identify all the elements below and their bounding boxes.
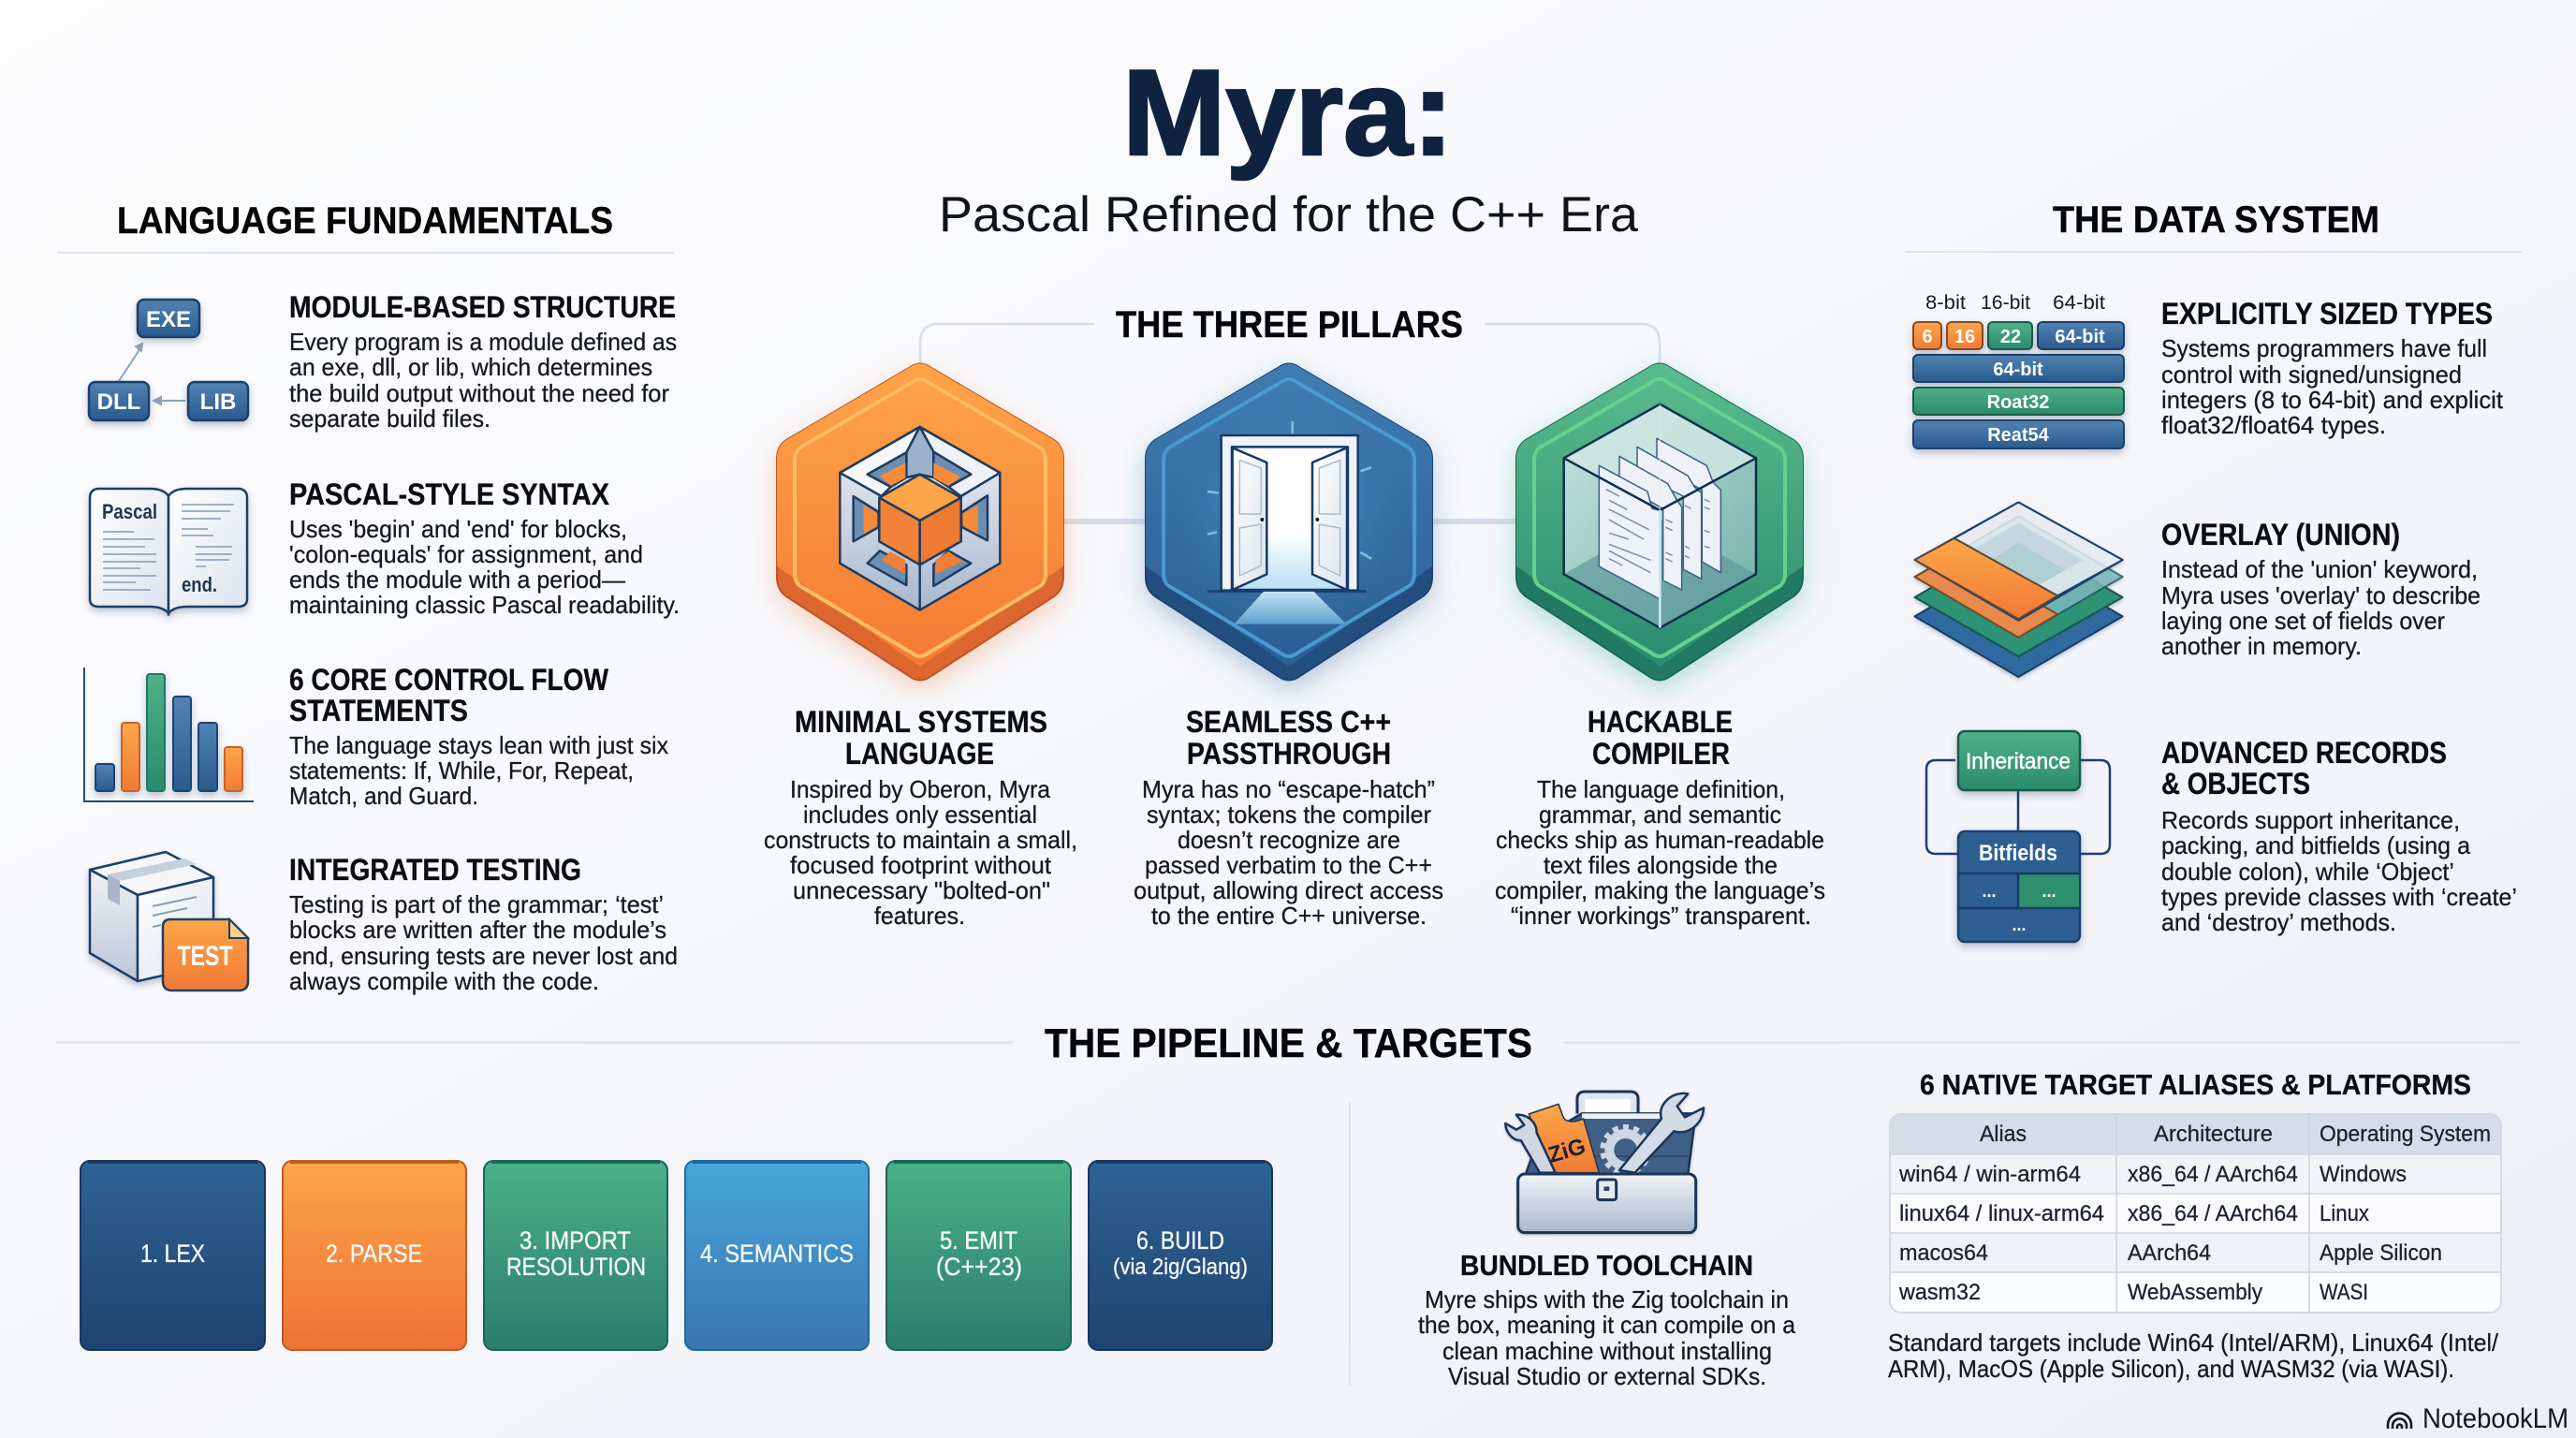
text: standard targets note: ARM), MacOS (Apple Silicon), and WASM32 (via WASI).	[1888, 1355, 2454, 1383]
text: seamless c++ passthrough: Myra has no “escape-hatch”	[1142, 775, 1435, 803]
pipeline step 4	[685, 1161, 869, 1350]
text: advanced records & objects: & OBJECTS	[2161, 767, 2310, 800]
text: minimal systems language: Inspired by Oberon, Myra	[790, 775, 1051, 803]
text: seamless c++ passthrough: doesn’t recognize are	[1178, 826, 1400, 854]
table: targets: x86_64 / AArch64	[2128, 1201, 2298, 1226]
table: targets: Architecture	[2154, 1122, 2273, 1147]
text: overlay (union): laying one set of fields over	[2161, 607, 2445, 635]
text: pascal-style syntax: ends the module with a period—	[289, 565, 625, 594]
heading: pipeline and targets: THE PIPELINE & TARGETS	[1045, 1020, 1532, 1066]
text: explicitly sized types: control with signed/unsigned	[2161, 360, 2462, 389]
text: minimal systems language: features.	[874, 902, 965, 930]
text: integrated testing	[289, 853, 678, 995]
pipeline step 3: RESOLUTION	[506, 1253, 646, 1281]
icon: test package	[90, 852, 248, 990]
text: bundled toolchain: BUNDLED TOOLCHAIN	[1460, 1249, 1753, 1282]
label: zig tag: ZiG	[1545, 1134, 1588, 1168]
text: hackable compiler: “inner workings” transparent.	[1511, 902, 1811, 930]
heading: language fundamentals: LANGUAGE FUNDAMENTALS	[117, 200, 613, 242]
subtitle: Pascal Refined for the C++ Era	[939, 187, 1639, 242]
text: hackable compiler: grammar, and semantic	[1539, 800, 1781, 829]
icon: module outputs: EXE	[146, 307, 191, 332]
text: pascal-style syntax	[289, 477, 680, 619]
icon: open book: Pascal	[102, 500, 157, 523]
pipeline step 6	[1089, 1161, 1272, 1350]
text: hackable compiler: compiler, making the language’s	[1495, 876, 1825, 904]
table: targets: Alias	[1980, 1122, 2027, 1147]
table: targets: Operating System	[2320, 1122, 2491, 1147]
text: module-based structure	[289, 290, 677, 433]
text: minimal systems language: focused footprint without	[790, 851, 1052, 879]
text: advanced records & objects: ADVANCED RECORDS	[2161, 736, 2447, 770]
icon: sized types	[1913, 292, 2124, 448]
icon: open book: end.	[182, 573, 217, 596]
text: bundled toolchain: Visual Studio or external SDKs.	[1448, 1362, 1766, 1390]
table: targets: macos64	[1899, 1240, 1988, 1266]
text: overlay (union)	[2161, 518, 2481, 660]
table: targets: linux64 / linux-arm64	[1899, 1201, 2104, 1226]
text: hackable compiler: checks ship as human-readable	[1496, 826, 1824, 854]
icon: sized types: 16	[1954, 327, 1975, 347]
icon: module outputs: LIB	[200, 389, 236, 415]
text: hackable compiler: The language definition,	[1537, 775, 1785, 803]
text: minimal systems language: unnecessary "bolted-on"	[793, 876, 1050, 904]
panel: pipeline and targets	[56, 1020, 2520, 1390]
pipeline step 2: 2. PARSE	[326, 1240, 422, 1268]
text: pascal-style syntax: PASCAL-STYLE SYNTAX	[289, 477, 610, 511]
text: bundled toolchain: the box, meaning it can compile on a	[1418, 1311, 1796, 1339]
text: hackable compiler: text files alongside the	[1544, 851, 1778, 879]
text: module-based structure: the build output without the need for	[289, 379, 669, 407]
text: module-based structure: an exe, dll, or lib, which determines	[289, 353, 652, 381]
icon: records and bitfields: Bitfields	[1979, 841, 2057, 866]
icon: records and bitfields: Inheritance	[1966, 749, 2071, 774]
icon: impossible cube	[840, 427, 1000, 610]
icon: sized types: 64-bit	[1993, 360, 2043, 380]
pipeline step 1	[80, 1161, 265, 1350]
icon: records and bitfields: ...	[2012, 916, 2027, 934]
text: overlay (union): another in memory.	[2161, 632, 2362, 660]
icon: overlay layers	[1915, 503, 2123, 677]
text: advanced records & objects: double colon), while ‘Object’	[2161, 858, 2454, 886]
pipeline step 3: 3. IMPORT	[520, 1226, 631, 1255]
heading: native target aliases: 6 NATIVE TARGET ALIASES & PLATFORMS	[1920, 1068, 2471, 1101]
icon: records and bitfields	[1926, 731, 2110, 942]
pipeline step 4: 4. SEMANTICS	[700, 1240, 854, 1268]
text: explicitly sized types	[2161, 297, 2504, 439]
text: minimal systems language: constructs to maintain a small,	[764, 826, 1077, 854]
icon: records and bitfields: ...	[1982, 882, 1997, 901]
text: seamless c++ passthrough: PASSTHROUGH	[1187, 737, 1391, 770]
table: targets: wasm32	[1898, 1280, 1981, 1305]
table: targets: Windows	[2320, 1162, 2407, 1187]
text: advanced records & objects: and ‘destroy’ methods.	[2161, 908, 2396, 936]
pillar: minimal systems language	[764, 356, 1077, 930]
text: seamless c++ passthrough: syntax; tokens the compiler	[1147, 800, 1431, 829]
panel: the data system	[1905, 199, 2522, 942]
icon: open book	[90, 489, 247, 613]
text: minimal systems language: LANGUAGE	[845, 737, 994, 770]
text: integrated testing: blocks are written after the module’s	[289, 916, 666, 944]
text: explicitly sized types: Systems programmers have full	[2161, 334, 2487, 362]
table: targets	[1890, 1114, 2501, 1313]
text: seamless c++ passthrough	[1134, 705, 1443, 930]
text: control flow statements: Match, and Guard.	[289, 782, 478, 810]
text: integrated testing: Testing is part of the grammar; ‘test’	[289, 890, 664, 918]
pipeline step 6: (via 2ig/Glang)	[1113, 1255, 1248, 1280]
icon: sized types: 6	[1922, 327, 1933, 347]
text: module-based structure: separate build files.	[289, 404, 490, 433]
table: targets: x86_64 / AArch64	[2128, 1162, 2298, 1187]
text: bundled toolchain: Myre ships with the Zig toolchain in	[1425, 1285, 1789, 1313]
text: minimal systems language: MINIMAL SYSTEMS	[795, 705, 1047, 739]
table: targets: Linux	[2320, 1201, 2369, 1226]
text: pascal-style syntax: Uses 'begin' and 'end' for blocks,	[289, 515, 627, 543]
pipeline step 5: 5. EMIT	[940, 1226, 1017, 1255]
table: targets: WASI	[2320, 1280, 2368, 1305]
pipeline step 6: 6. BUILD	[1136, 1226, 1224, 1255]
text: explicitly sized types: integers (8 to 64-bit) and explicit	[2161, 386, 2504, 414]
heading: the data system: THE DATA SYSTEM	[2053, 199, 2379, 241]
hexagon: blue	[1139, 356, 1439, 680]
text: hackable compiler	[1495, 705, 1825, 930]
text: explicitly sized types: float32/float64 types.	[2161, 411, 2386, 439]
table: targets: Apple Silicon	[2320, 1240, 2442, 1266]
pillar: seamless c++ passthrough	[1134, 356, 1443, 930]
icon: glass cube of documents	[1564, 404, 1756, 628]
text: advanced records & objects: Records support inheritance,	[2161, 806, 2460, 834]
text: minimal systems language: includes only essential	[803, 800, 1037, 829]
icon: sized types: 64-bit	[2055, 327, 2105, 347]
text: bundled toolchain	[1418, 1249, 1796, 1390]
icon: bar chart	[84, 668, 254, 801]
icon: sized types: 8-bit	[1925, 292, 1966, 314]
text: hackable compiler: HACKABLE	[1588, 705, 1733, 739]
text: control flow statements	[289, 663, 668, 810]
icon: sized types: 22	[2000, 327, 2021, 347]
icon: toolbox	[1505, 1092, 1704, 1233]
text: control flow statements: The language stays lean with just six	[289, 731, 668, 759]
text: overlay (union): Instead of the 'union' keyword,	[2161, 555, 2478, 583]
hexagon: green	[1510, 356, 1809, 680]
text: advanced records & objects: packing, and bitfields (using a	[2161, 831, 2471, 859]
text: hackable compiler: COMPILER	[1592, 737, 1730, 770]
table: targets: win64 / win-arm64	[1898, 1162, 2081, 1187]
table: targets: WebAssembly	[2128, 1280, 2262, 1305]
icon: test package: TEST	[178, 941, 232, 972]
text: integrated testing: always compile with the code.	[289, 967, 599, 995]
icon: sized types: 16-bit	[1981, 292, 2030, 314]
pillar: hackable compiler	[1495, 356, 1825, 930]
text: overlay (union): OVERLAY (UNION)	[2161, 518, 2400, 551]
pipeline step 1: 1. LEX	[140, 1240, 205, 1268]
text: seamless c++ passthrough: passed verbatim to the C++	[1145, 851, 1432, 879]
text: integrated testing: end, ensuring tests are never lost and	[289, 942, 678, 970]
text: control flow statements: STATEMENTS	[289, 694, 468, 727]
text: advanced records & objects: types previde classes with ‘create’	[2161, 883, 2517, 911]
icon: sized types: 64-bit	[2053, 292, 2105, 314]
text: control flow statements: statements: If, While, For, Repeat,	[289, 756, 634, 785]
text: advanced records & objects	[2161, 736, 2517, 936]
text: pascal-style syntax: 'colon-equals' for assignment, and	[289, 540, 643, 568]
text: integrated testing: INTEGRATED TESTING	[289, 853, 581, 887]
text: bundled toolchain: clean machine without installing	[1442, 1337, 1772, 1365]
text: seamless c++ passthrough: output, allowing direct access	[1134, 876, 1443, 904]
title: Myra:	[1122, 44, 1454, 181]
pipeline step 3	[484, 1161, 667, 1350]
text: control flow statements: 6 CORE CONTROL FLOW	[289, 663, 609, 697]
table: targets: AArch64	[2128, 1240, 2211, 1266]
text: module-based structure: MODULE-BASED STRUCTURE	[289, 290, 676, 324]
pipeline step 2	[283, 1161, 466, 1350]
icon: open door	[1208, 421, 1371, 624]
text: pascal-style syntax: maintaining classic Pascal readability.	[289, 591, 680, 619]
panel: three pillars	[764, 304, 1825, 930]
pipeline step 5	[886, 1161, 1071, 1350]
text: module-based structure: Every program is a module defined as	[289, 328, 677, 356]
text: overlay (union): Myra uses 'overlay' to describe	[2161, 581, 2481, 609]
icon: sized types: Roat32	[1987, 392, 2049, 413]
text: seamless c++ passthrough: to the entire C++ universe.	[1151, 902, 1427, 930]
text: seamless c++ passthrough: SEAMLESS C++	[1186, 705, 1391, 739]
icon: module outputs	[89, 300, 248, 420]
text: minimal systems language	[764, 705, 1077, 930]
text: explicitly sized types: EXPLICITLY SIZED TYPES	[2161, 297, 2493, 330]
panel: language fundamentals	[57, 200, 680, 995]
heading: three pillars: THE THREE PILLARS	[1116, 304, 1463, 345]
text: standard targets note: Standard targets include Win64 (Intel/ARM), Linux64 (Intel/	[1888, 1328, 2499, 1357]
text: standard targets note	[1888, 1328, 2499, 1383]
icon: sized types: Reat54	[1987, 425, 2050, 446]
pipeline step 5: (C++23)	[936, 1253, 1022, 1281]
icon: records and bitfields: ...	[2042, 882, 2056, 901]
icon: module outputs: DLL	[97, 389, 140, 415]
hexagon: orange	[770, 356, 1070, 680]
